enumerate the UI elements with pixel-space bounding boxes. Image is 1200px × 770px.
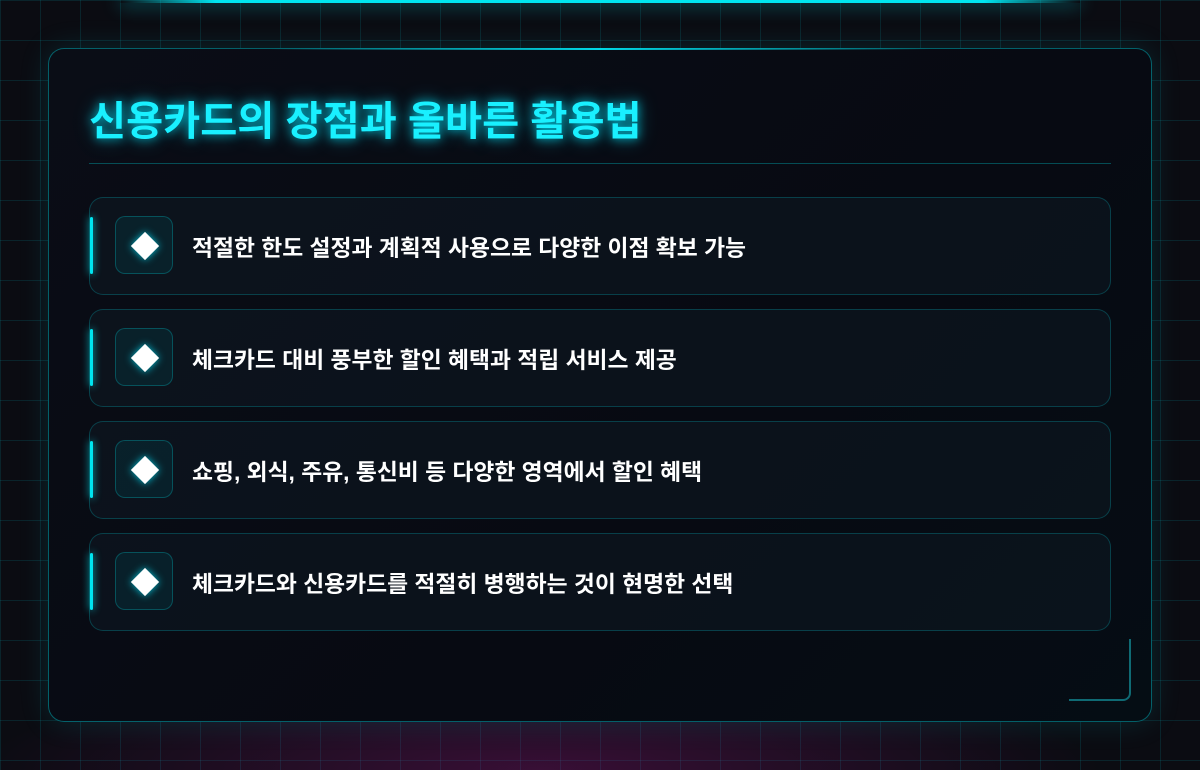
item 2: 체크카드 대비 풍부한 할인 혜택과 적립 서비스 제공 xyxy=(192,347,677,373)
title: 신용카드의 장점과 올바른 활용법 xyxy=(89,99,642,144)
corner accent xyxy=(1069,639,1131,701)
item 1: 적절한 한도 설정과 계획적 사용으로 다양한 이점 확보 가능 xyxy=(192,235,746,261)
item 4: 체크카드와 신용카드를 적절히 병행하는 것이 현명한 선택 xyxy=(192,571,733,597)
item 4 xyxy=(89,533,1111,631)
item 2 xyxy=(89,309,1111,407)
item 1 xyxy=(89,197,1111,295)
item 3 xyxy=(89,421,1111,519)
item 3: 쇼핑, 외식, 주유, 통신비 등 다양한 영역에서 할인 혜택 xyxy=(192,459,702,485)
